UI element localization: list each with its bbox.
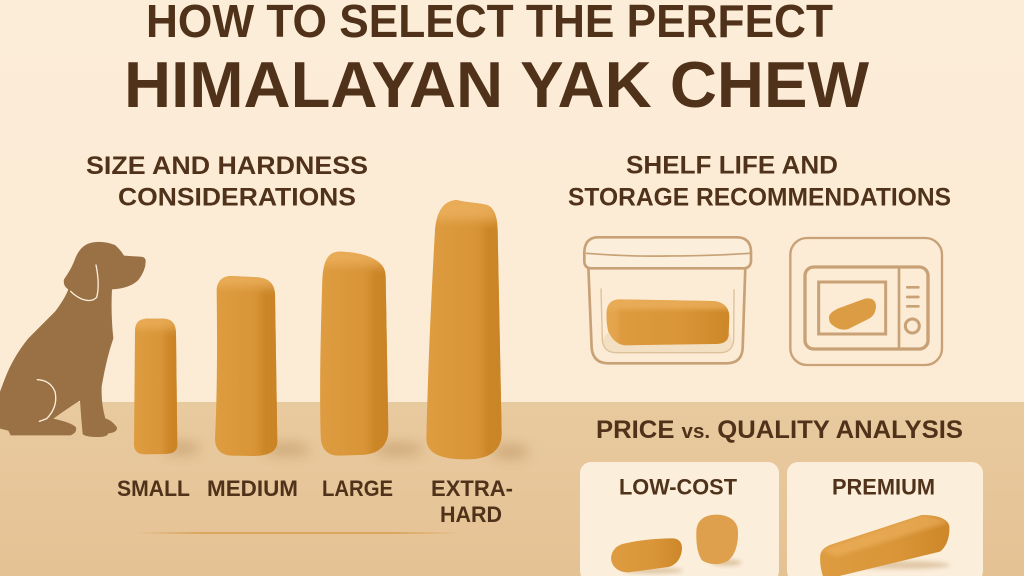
chew: large [318, 247, 423, 457]
chew: extra-hard [426, 195, 528, 460]
heading: shelf life and storage: STORAGE RECOMMENDATIONS [568, 184, 951, 212]
icon: storage container with chew [584, 237, 751, 363]
chews row [132, 195, 528, 460]
size labels: EXTRA- [431, 476, 513, 501]
size labels: SMALL [117, 476, 190, 501]
heading: price vs quality: PRICE vs. QUALITY ANALYSIS [596, 416, 963, 444]
heading: shelf life and storage: SHELF LIFE AND [626, 152, 838, 180]
size labels: LARGE [322, 476, 393, 501]
chew: small [132, 315, 200, 457]
heading: shelf life and storage [568, 152, 951, 212]
low-cost label: LOW-COST [619, 474, 738, 500]
chew: medium [213, 272, 310, 457]
premium chew [820, 513, 950, 576]
low-cost chews [611, 515, 742, 573]
size labels [117, 476, 513, 527]
panel: premium [787, 462, 983, 576]
heading: size and hardness: CONSIDERATIONS [118, 184, 356, 212]
icon: microwave with chew [790, 238, 942, 365]
panel: low-cost [580, 462, 779, 576]
size labels: HARD [440, 502, 502, 527]
heading: size and hardness [86, 152, 368, 212]
icon: sitting dog silhouette [0, 242, 146, 437]
premium label: PREMIUM [832, 474, 935, 500]
size labels: MEDIUM [207, 476, 298, 501]
microwave chew [829, 298, 876, 330]
title [124, 0, 870, 121]
heading: size and hardness: SIZE AND HARDNESS [86, 152, 368, 180]
tabletop floor band [0, 402, 1024, 576]
title: HIMALAYAN YAK CHEW [124, 48, 870, 121]
